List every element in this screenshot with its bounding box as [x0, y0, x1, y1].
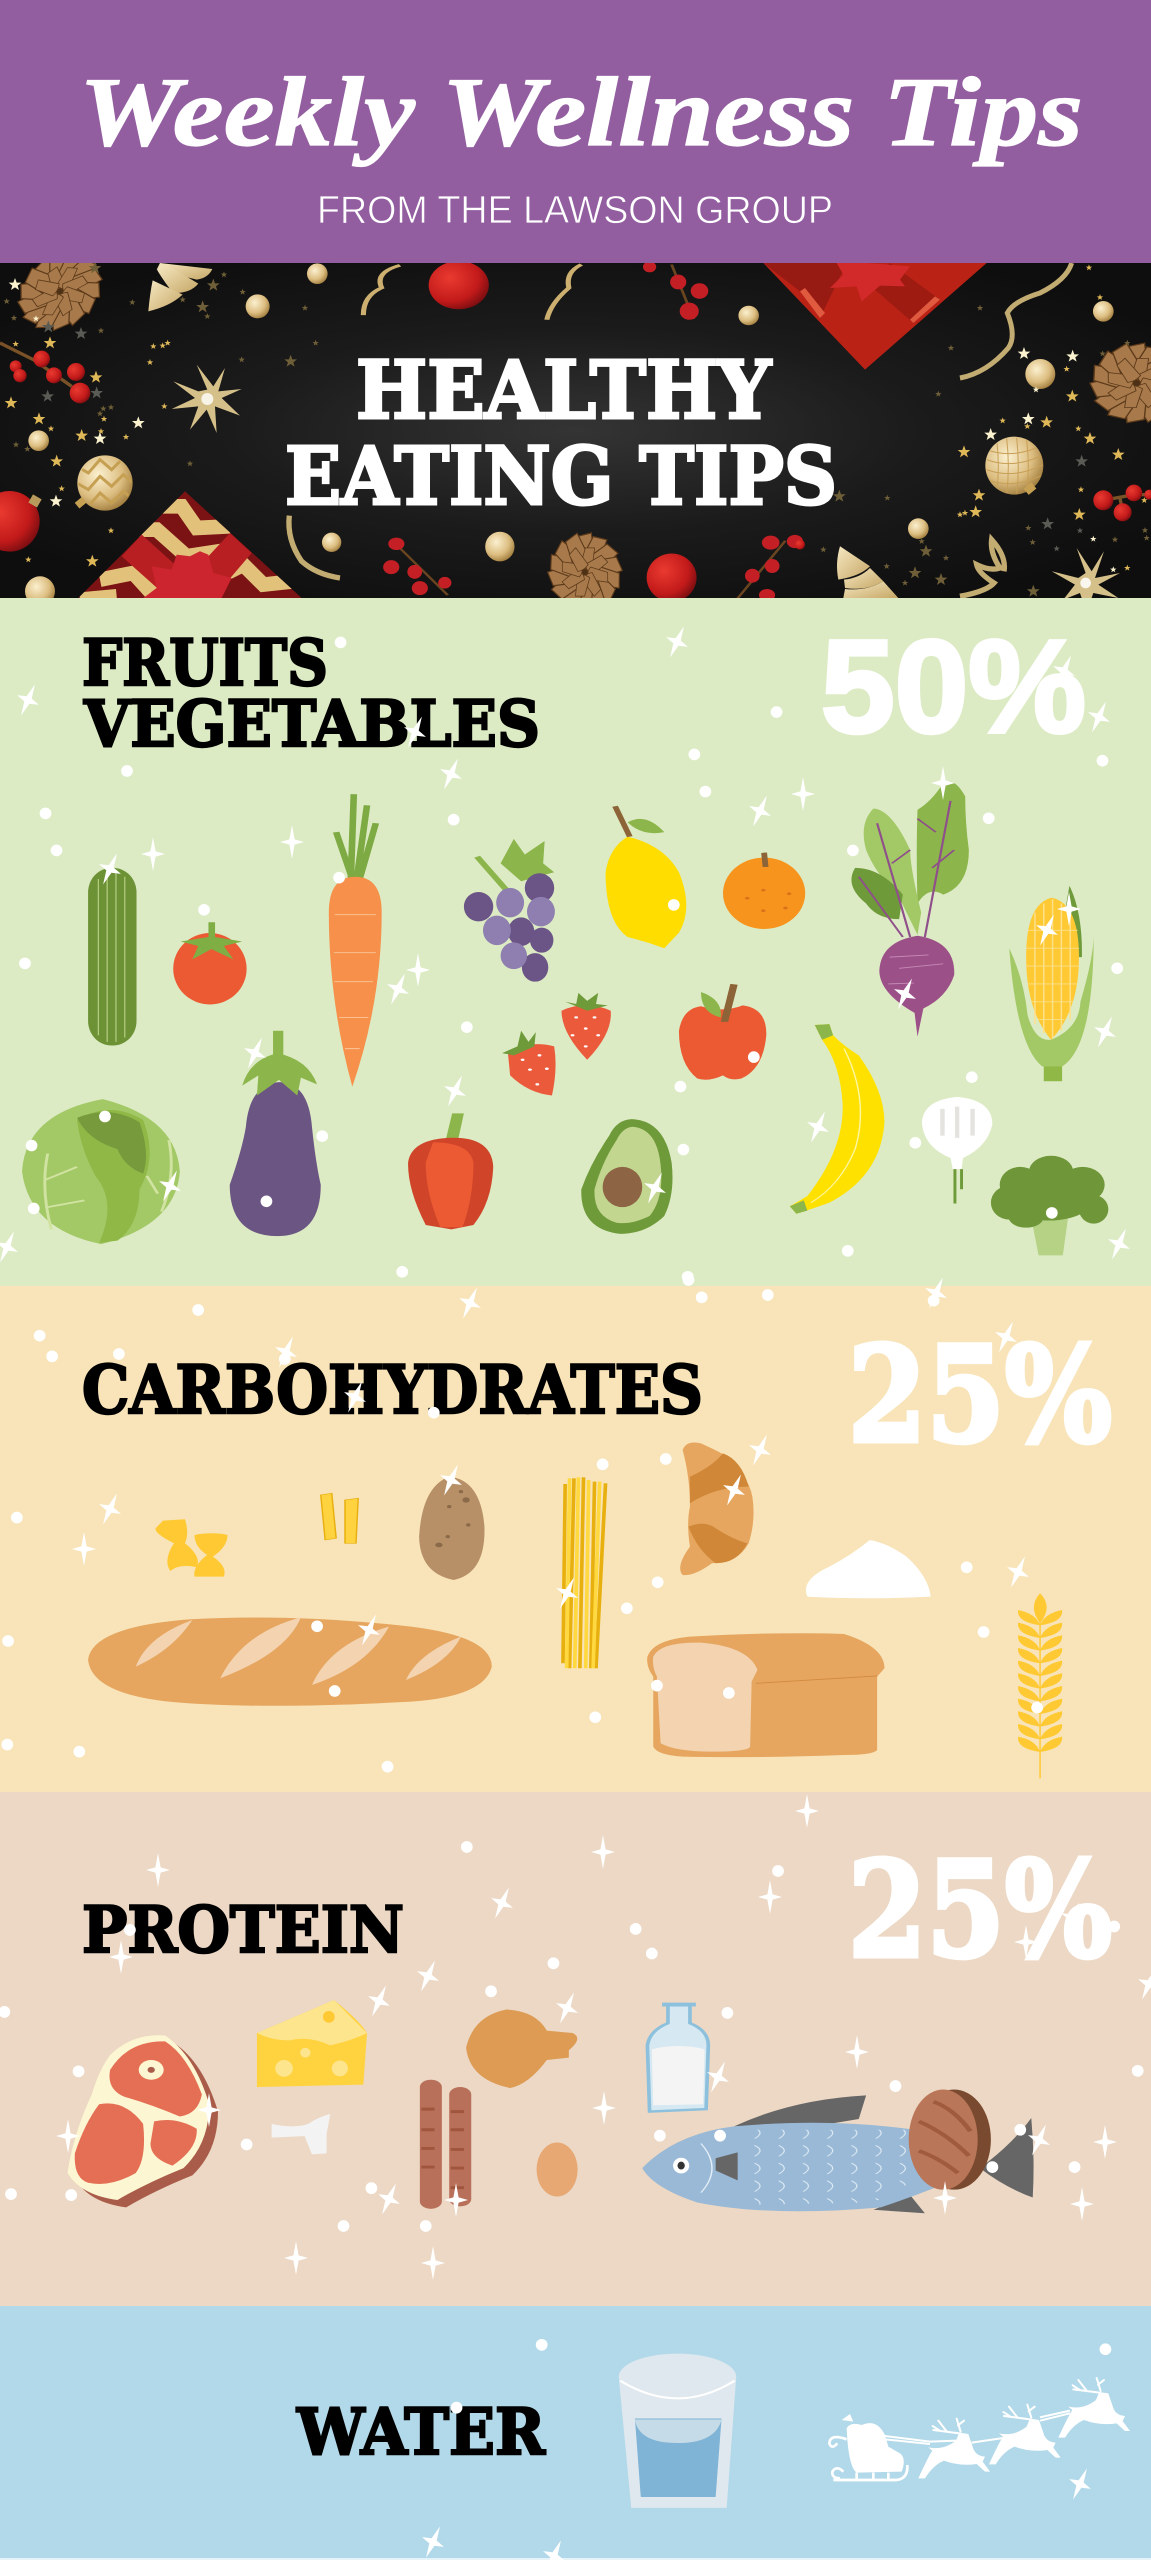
- bread loaf: [647, 1633, 884, 1757]
- beet: [851, 781, 969, 1037]
- gold stars left: [5, 278, 171, 567]
- grapes: [464, 839, 555, 982]
- banner heading: [285, 343, 837, 523]
- percentage 50: 50%: [821, 613, 1086, 760]
- glass of water: [619, 2354, 736, 2508]
- red baubles: [429, 261, 697, 602]
- bread roll: [909, 2090, 991, 2190]
- corn: [1009, 886, 1094, 1081]
- panel: carbohydrates: [1, 1273, 1112, 1778]
- snow dots: [1, 1274, 1043, 1772]
- cabbage: [22, 1099, 180, 1244]
- avocado: [581, 1119, 673, 1234]
- farfalle: [156, 1519, 228, 1577]
- broccoli: [991, 1156, 1108, 1255]
- banana: [790, 1024, 884, 1214]
- steak: [68, 2035, 218, 2207]
- gold stars right: [957, 264, 1147, 572]
- left ornaments: [0, 235, 341, 606]
- sausages: [420, 2080, 471, 2209]
- wheat: [1018, 1593, 1062, 1778]
- patterned bauble right: [985, 437, 1043, 495]
- food illustrations: [22, 781, 1108, 1255]
- sparkles: [56, 1794, 1151, 2280]
- panel: protein: [0, 1794, 1151, 2280]
- gold baubles: [485, 306, 759, 561]
- snow dots: [451, 2339, 1111, 2414]
- ribbon lower right: [960, 540, 1004, 596]
- panel: festive banner ornaments: [0, 235, 1151, 613]
- snow dots: [19, 637, 1123, 1283]
- heading: fruits vegetables: VEGETABLES: [83, 687, 540, 762]
- cheese: [257, 2000, 367, 2087]
- gift box left: [78, 491, 302, 600]
- heading: fruits vegetables: [82, 626, 540, 762]
- sparkles: [72, 1273, 1036, 1650]
- gold baubles right: [908, 301, 1114, 539]
- baguette: [88, 1617, 492, 1706]
- berries right: [795, 485, 1151, 550]
- bone: [272, 2114, 330, 2154]
- banner heading: HEALTHY: [356, 343, 772, 437]
- big star left: [172, 365, 242, 433]
- pinecone centre: [547, 532, 623, 598]
- snow dots: [0, 1841, 1144, 2232]
- garlic: [922, 1097, 992, 1204]
- bell pepper: [408, 1113, 493, 1229]
- fish: [642, 2095, 1034, 2213]
- pinecone left: [17, 263, 103, 332]
- gold baubles left: [25, 263, 341, 606]
- sparkles: [415, 2464, 1098, 2560]
- carrot: [329, 794, 382, 1087]
- percentage 25: 25%: [848, 1833, 1112, 1988]
- cucumber: [88, 868, 137, 1046]
- santa sleigh and reindeer: [829, 2378, 1130, 2480]
- heading: protein: PROTEIN: [82, 1893, 404, 1968]
- pinecone right: [1089, 342, 1151, 424]
- chicken: [466, 2009, 577, 2088]
- sparkles: [0, 622, 1137, 1267]
- ribbon right: [960, 263, 1072, 378]
- patterned bauble left: [75, 455, 133, 511]
- milk bottle: [647, 2005, 708, 2112]
- cream tree left: [148, 263, 212, 311]
- title: Weekly Wellness Tips: [79, 58, 1083, 167]
- ribbons: [363, 265, 581, 320]
- percentage 25: 25%: [848, 1318, 1112, 1473]
- food illustrations: [68, 2000, 1034, 2213]
- berries: [383, 261, 803, 601]
- egg: [537, 2143, 578, 2197]
- penne: [321, 1493, 358, 1543]
- tomato: [173, 922, 247, 1004]
- food illustrations: [88, 1442, 1062, 1778]
- apple: [679, 984, 766, 1080]
- croissant: [680, 1442, 754, 1575]
- orange: [723, 853, 805, 929]
- berries left: [0, 343, 90, 403]
- lemon: [606, 806, 686, 948]
- potato: [419, 1477, 485, 1580]
- heading: carbohydrates: CARBOHYDRATES: [82, 1351, 703, 1429]
- eggplant: [230, 1031, 321, 1236]
- centre ornaments: [363, 261, 803, 602]
- spaghetti: [563, 1477, 606, 1668]
- flour: [806, 1540, 931, 1598]
- right ornaments: [763, 263, 1151, 613]
- banner heading: EATING TIPS: [285, 429, 837, 523]
- panel: fruits and vegetables: [0, 613, 1137, 1283]
- cream tree right: [837, 546, 898, 598]
- heading: water: WATER: [296, 2395, 546, 2470]
- big star right: [1052, 548, 1120, 598]
- subtitle: FROM THE LAWSON GROUP: [317, 189, 833, 232]
- dim stars left: [3, 261, 319, 466]
- gift box right: [763, 263, 987, 370]
- panel: water: [296, 2339, 1130, 2560]
- ribbon left: [289, 516, 340, 578]
- heading: fruits vegetables: FRUITS: [82, 626, 328, 701]
- red bauble left: [0, 491, 42, 552]
- strawberries: [502, 993, 611, 1096]
- dim stars right: [820, 305, 1150, 597]
